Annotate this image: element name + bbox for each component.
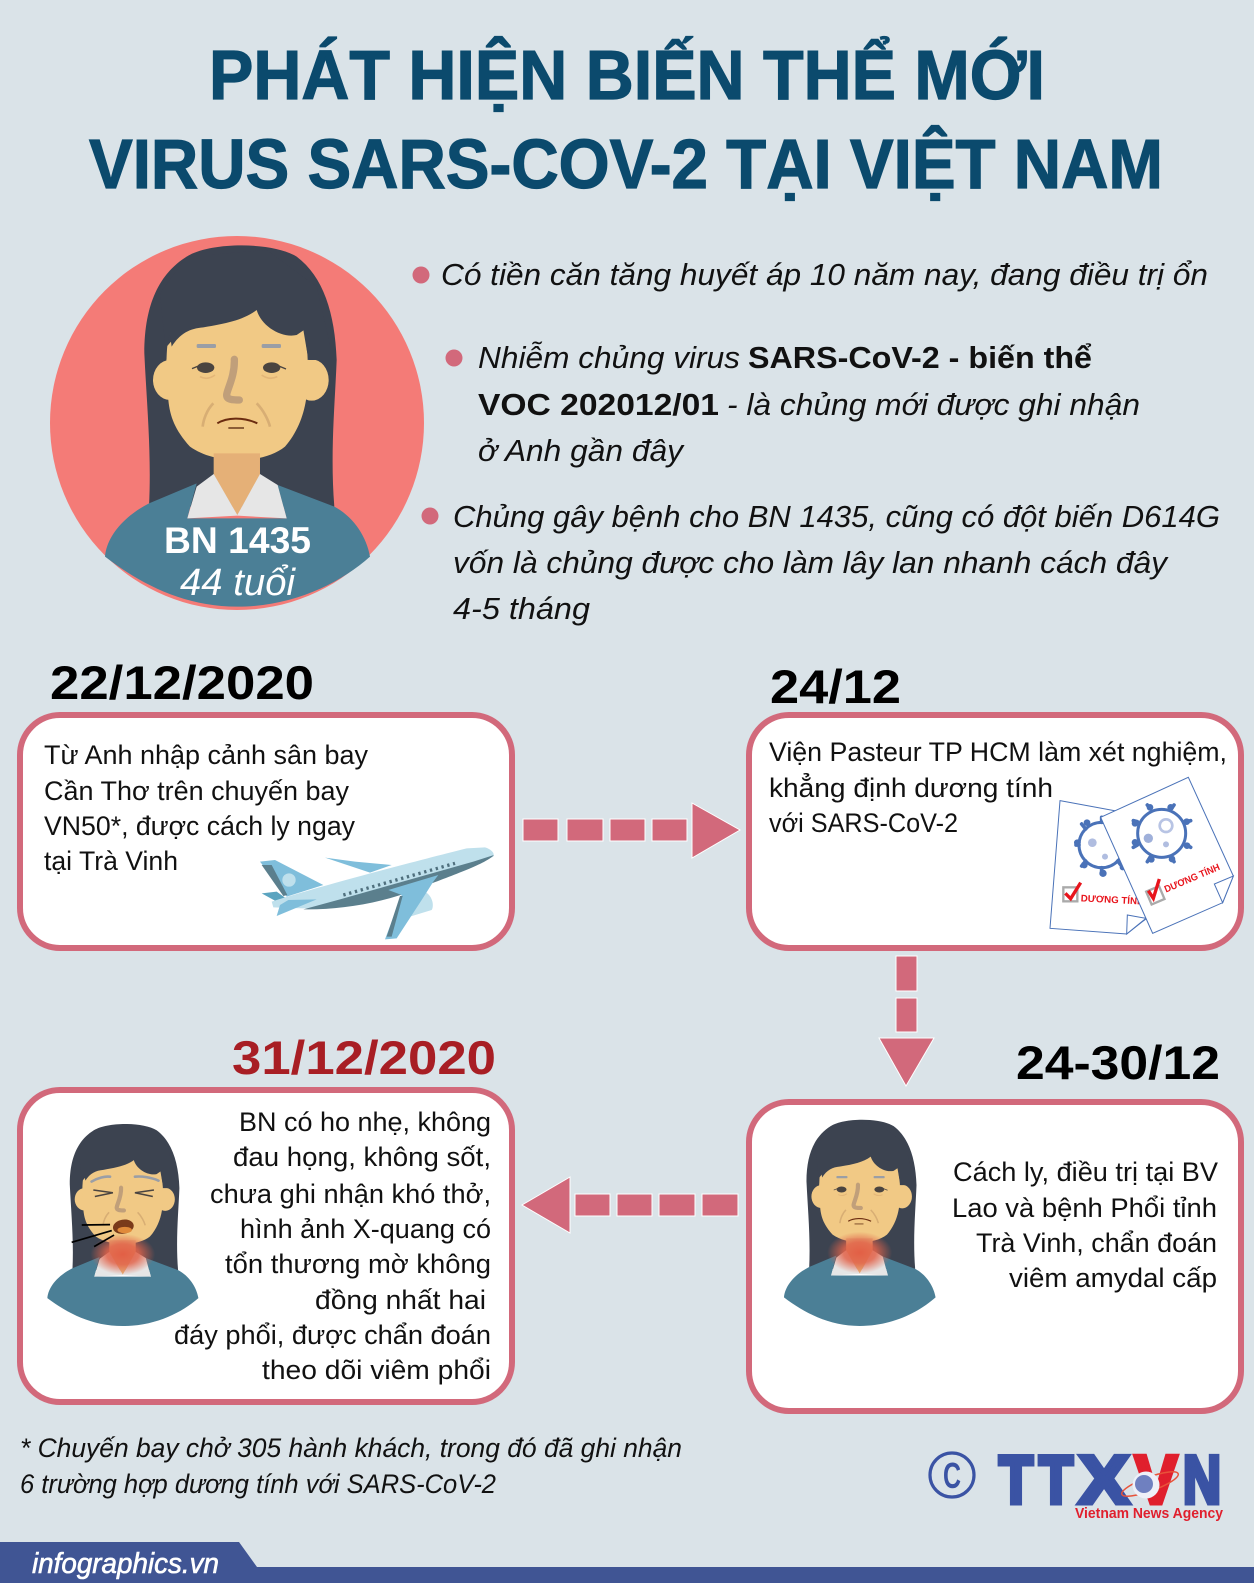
- bullet 3: [422, 499, 1220, 626]
- portrait circle: [50, 236, 424, 610]
- site name: infographics.vn: [32, 1548, 219, 1580]
- arrow: right: [523, 803, 740, 858]
- logo: TTXVN: Vietnam News Agency: [1075, 1506, 1223, 1522]
- patient portrait: [50, 236, 424, 610]
- arrow: down: [879, 956, 934, 1086]
- logo: TTXVN: V: [1135, 1442, 1177, 1518]
- bullet 1: Có tiền căn tăng huyết áp 10 năm nay, đang điều trị ổn: [441, 257, 1208, 292]
- arrow: left: [522, 1177, 738, 1233]
- bullet 2: Nhiễm chủng virus: [478, 340, 740, 375]
- bullet 2: VOC 202012/01: [478, 387, 719, 422]
- bullet 2: ở Anh gần đây: [478, 433, 686, 468]
- title: [89, 35, 1163, 203]
- diagnosis text: [174, 1107, 491, 1385]
- title: VIRUS SARS-COV-2 TẠI VIỆT NAM: [89, 124, 1163, 203]
- treatment text: viêm amydal cấp: [1009, 1263, 1217, 1293]
- arrival text: Từ Anh nhập cảnh sân bay: [44, 740, 368, 770]
- icon: positive test documents: DƯƠNG TÍNH: [1081, 893, 1144, 908]
- diagnosis text: đồng nhất hai: [315, 1285, 486, 1315]
- treatment text: [952, 1157, 1218, 1293]
- logo: TTXVN: N: [1183, 1442, 1221, 1518]
- bullet 2: - là chủng mới được ghi nhận: [727, 387, 1140, 422]
- logo: TTXVN: X: [1079, 1442, 1129, 1518]
- date: 31/12/2020: 31/12/2020: [232, 1031, 496, 1084]
- test text: với SARS-CoV-2: [769, 808, 958, 838]
- panel: pneumonia diagnosis: [20, 1090, 512, 1402]
- portrait: coughing: [47, 1124, 198, 1326]
- panel: Pasteur test: [749, 715, 1241, 948]
- footnote: 6 trường hợp dương tính với SARS-CoV-2: [20, 1469, 496, 1499]
- date: 24/12: 24/12: [770, 660, 901, 713]
- date: 22/12/2020: 22/12/2020: [50, 656, 314, 709]
- diagnosis text: chưa ghi nhận khó thở,: [210, 1179, 491, 1209]
- date: 24-30/12: 24-30/12: [1016, 1036, 1220, 1089]
- footer bar: [0, 1542, 1254, 1583]
- bullet 3: vốn là chủng được cho làm lây lan nhanh cách đây: [453, 545, 1170, 580]
- treatment text: Trà Vinh, chẩn đoán: [976, 1228, 1217, 1258]
- bullet 3: 4-5 tháng: [453, 591, 590, 626]
- bullet 2: SARS-CoV-2 - biến thể: [748, 340, 1092, 375]
- copyright symbol: C: [943, 1455, 961, 1496]
- logo: TTXVN: T: [999, 1442, 1033, 1518]
- treatment text: Cách ly, điều trị tại BV: [953, 1157, 1218, 1187]
- portrait: sore throat: [784, 1120, 936, 1326]
- bullet 2: [446, 340, 1140, 468]
- treatment text: Lao và bệnh Phổi tỉnh: [952, 1193, 1217, 1223]
- panel: isolation treatment: [749, 1102, 1241, 1411]
- icon: positive test documents: DƯƠNG TÍNH: [1163, 862, 1222, 895]
- diagnosis text: đau họng, không sốt,: [233, 1142, 491, 1172]
- test text: khẳng định dương tính: [769, 771, 1053, 803]
- test text: Viện Pasteur TP HCM làm xét nghiệm,: [769, 737, 1227, 767]
- logo: TTXVN: T: [1039, 1442, 1073, 1518]
- icon: positive test documents: [1050, 777, 1233, 934]
- bullet 3: Chủng gây bệnh cho BN 1435, cũng có đột biến D614G: [453, 499, 1220, 534]
- icon: airplane: [260, 847, 494, 939]
- panel: arrival: [20, 715, 512, 948]
- title: PHÁT HIỆN BIẾN THỂ MỚI: [209, 35, 1045, 114]
- diagnosis text: theo dõi viêm phổi: [262, 1355, 491, 1385]
- diagnosis text: hình ảnh X-quang có: [240, 1214, 491, 1244]
- arrival text: VN50*, được cách ly ngay: [44, 811, 355, 841]
- patient age: 44 tuổi: [180, 562, 297, 604]
- patient label: BN 1435: [164, 520, 311, 561]
- logo: TTXVN: [999, 1442, 1223, 1522]
- arrival text: Cần Thơ trên chuyến bay: [44, 776, 349, 806]
- diagnosis text: BN có ho nhẹ, không: [239, 1107, 491, 1137]
- footnote: [20, 1433, 682, 1499]
- diagnosis text: đáy phổi, được chẩn đoán: [174, 1320, 491, 1350]
- bullet list: patient facts: [412, 257, 1220, 626]
- arrival text: [44, 740, 368, 876]
- arrival text: tại Trà Vinh: [44, 846, 178, 876]
- test text: [769, 737, 1227, 838]
- copyright symbol: [930, 1453, 974, 1497]
- diagnosis text: tổn thương mờ không: [225, 1249, 491, 1279]
- footnote: * Chuyến bay chở 305 hành khách, trong đó đã ghi nhận: [20, 1433, 682, 1463]
- patient illustration: [105, 245, 370, 607]
